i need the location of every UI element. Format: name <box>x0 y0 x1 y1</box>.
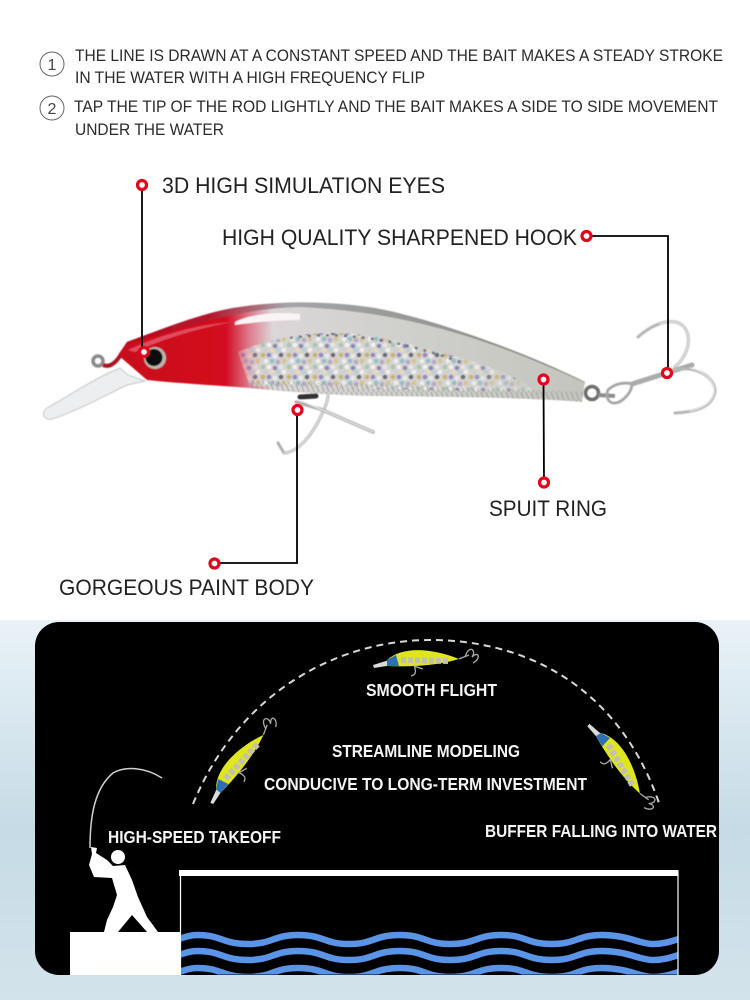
lure bill <box>44 368 145 419</box>
smooth flight label: SMOOTH FLIGHT <box>366 680 497 700</box>
tail treble hook <box>632 322 715 413</box>
eye marker bottom <box>140 348 148 356</box>
callout: 3D eyes <box>138 173 445 356</box>
paint marker bottom <box>210 559 219 568</box>
lure eye <box>144 347 166 369</box>
step 2 text <box>74 97 718 139</box>
step 2 text: UNDER THE WATER <box>75 120 224 139</box>
page background <box>0 0 750 620</box>
step 2 number: 2 <box>48 101 57 118</box>
top lure <box>373 649 478 676</box>
buffer label: BUFFER FALLING INTO WATER <box>485 821 717 841</box>
black panel <box>35 622 719 975</box>
investment label: CONDUCIVE TO LONG-TERM INVESTMENT <box>264 774 587 794</box>
step 2 number <box>40 96 64 120</box>
paint leader line <box>214 410 297 563</box>
hook label: HIGH QUALITY SHARPENED HOOK <box>222 225 577 250</box>
hook marker bottom <box>662 368 672 378</box>
water frame top bar <box>179 870 678 876</box>
paint marker top <box>293 406 302 414</box>
eye leader line <box>141 185 143 352</box>
step 1 text: IN THE WATER WITH A HIGH FREQUENCY FLIP <box>75 68 425 87</box>
eye label: 3D HIGH SIMULATION EYES <box>162 173 445 198</box>
eye marker top <box>138 180 146 190</box>
shore platform <box>70 932 180 975</box>
front ring <box>93 356 120 366</box>
paint label: GORGEOUS PAINT BODY <box>59 575 314 600</box>
step 1 number: 1 <box>48 57 57 74</box>
streamline label: STREAMLINE MODELING <box>332 741 520 761</box>
water waves <box>170 935 685 977</box>
tail ring and swivel <box>586 383 632 403</box>
left lure <box>199 714 289 810</box>
lure body <box>118 302 586 402</box>
right lure <box>580 715 658 819</box>
spuit label: SPUIT RING <box>489 496 607 521</box>
angler silhouette <box>89 847 158 932</box>
hook leader line <box>586 236 668 373</box>
fishing lure photo <box>44 295 715 453</box>
panel: casting diagram <box>35 622 719 977</box>
takeoff label: HIGH-SPEED TAKEOFF <box>108 827 281 847</box>
fishing rod <box>90 769 162 848</box>
spuit marker bottom <box>540 478 548 487</box>
hook marker top <box>582 232 591 240</box>
spuit leader line <box>542 380 545 482</box>
step 1 text <box>75 46 723 87</box>
step 1 number <box>40 52 64 76</box>
callout: paint body <box>59 406 314 600</box>
lower background band <box>0 620 750 1000</box>
callout: spuit ring <box>489 375 607 521</box>
callout: sharpened hook <box>222 225 672 378</box>
belly hook <box>278 360 373 453</box>
flight arc <box>193 640 659 804</box>
water frame <box>180 873 678 975</box>
instruction list <box>40 46 723 139</box>
spuit marker top <box>539 375 548 384</box>
